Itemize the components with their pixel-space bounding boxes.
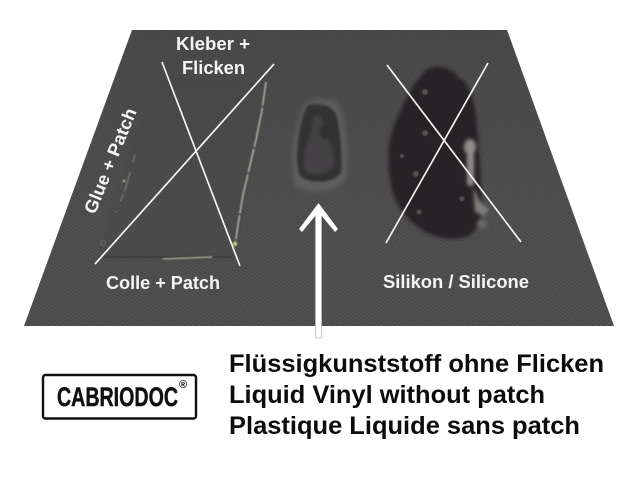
logo: Cabriodoc: ® [179,379,187,391]
silicone repair stain [388,67,489,239]
caption: product description [229,350,604,440]
liquid vinyl repair spot [292,99,347,191]
crossed out: silicone [386,63,521,243]
logo: Cabriodoc [43,375,196,418]
caption: product description: Plastique Liquide sans patch [229,412,580,440]
caption: product description: Liquid Vinyl without patch [229,381,545,409]
label: Kleber + Flicken [176,34,250,78]
caption: product description: Flüssigkunststoff ohne Flicken [229,350,604,378]
label: Kleber + Flicken: Flicken [182,58,245,78]
panel: fabric sample photo [24,30,614,326]
crossed out: glue and patch [95,62,274,266]
label: Colle + Patch: Colle + Patch [106,273,220,293]
label: Glue + Patch: Glue + Patch [80,105,141,216]
worn edge of stain [464,139,489,228]
arrow pointing to liquid vinyl spot [299,203,338,338]
glue and patch repair residue [99,78,266,259]
logo: Cabriodoc: CABRIODOC [57,382,178,412]
label: Silikon / Silicone: Silikon / Silicone [383,272,529,292]
label: Kleber + Flicken: Kleber + [176,34,250,54]
